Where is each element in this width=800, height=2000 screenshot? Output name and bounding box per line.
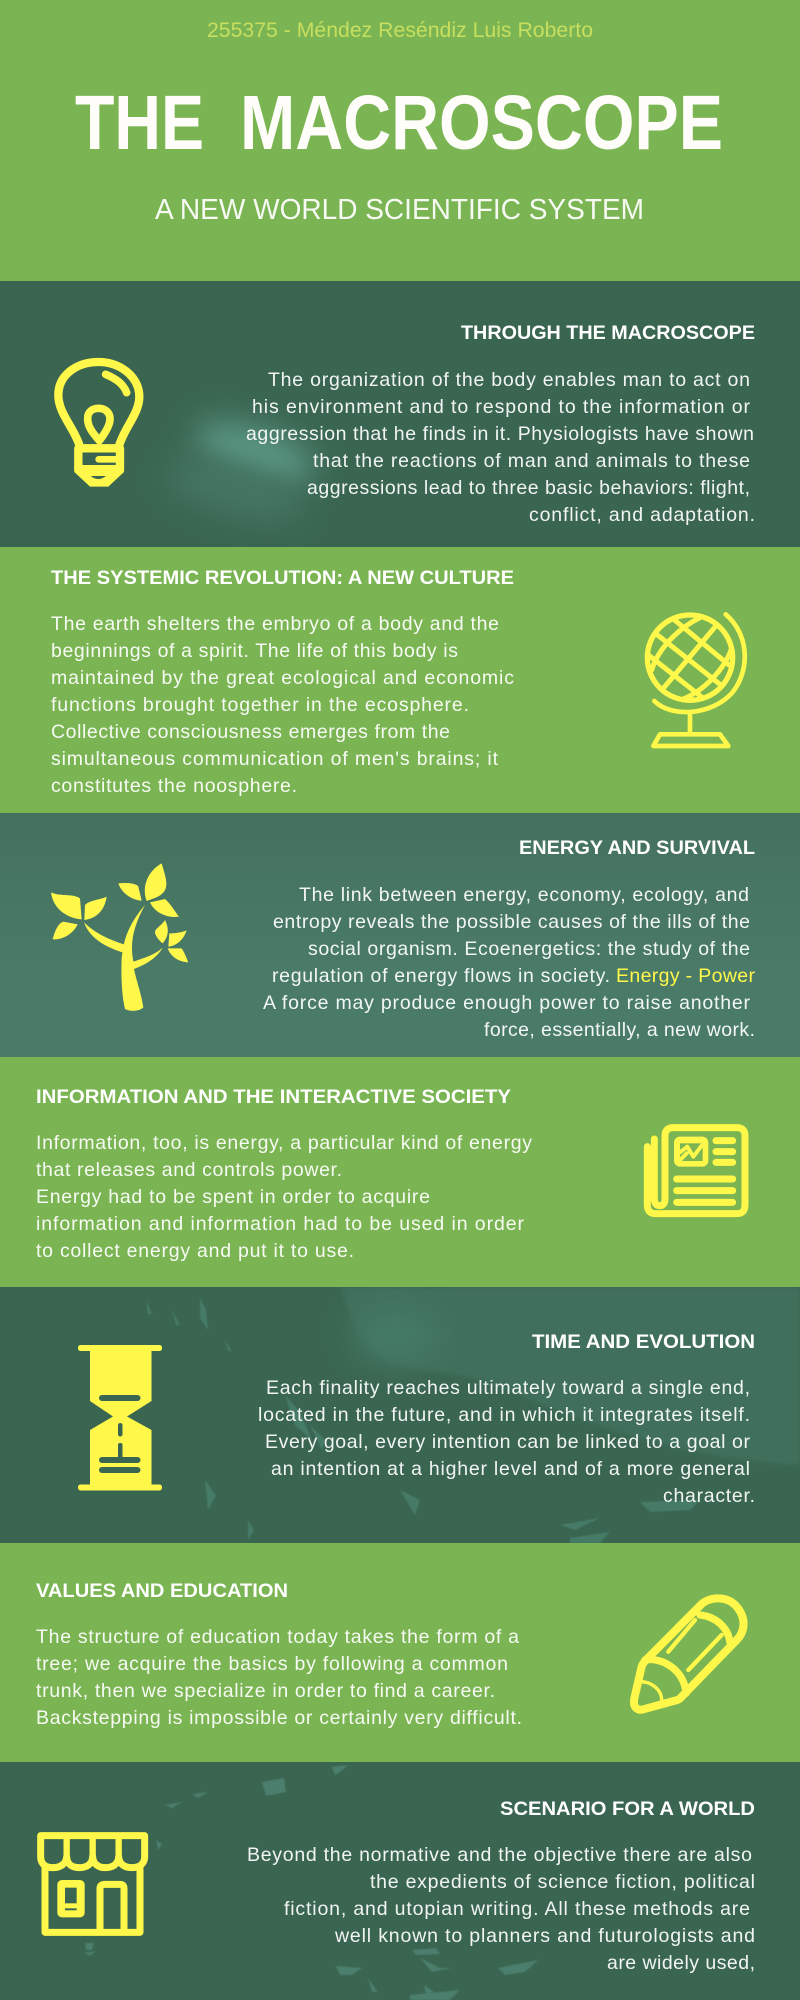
body text: trunk, then we specialize in order to find a career.	[36, 1680, 495, 1702]
body text: social organism. Ecoenergetics: the study of the	[308, 938, 750, 960]
body text: simultaneous communication of men's brains; it	[51, 748, 499, 770]
heading: ENERGY AND SURVIVAL	[519, 837, 755, 859]
body text	[51, 613, 514, 797]
body text: A force may produce enough power to raise another	[263, 992, 750, 1014]
body text: Each finality reaches ultimately toward a single end,	[266, 1377, 750, 1399]
panel: values and education	[0, 1543, 800, 1762]
body text: conflict, and adaptation.	[529, 504, 755, 526]
title	[75, 80, 723, 166]
panel: information and the interactive society	[0, 1057, 800, 1287]
body text: that releases and controls power.	[36, 1159, 342, 1181]
body text: Every goal, every intention can be linked to a goal or	[265, 1431, 750, 1453]
body text: information and information had to be used in order	[36, 1213, 524, 1235]
heading: SCENARIO FOR A WORLD	[500, 1798, 755, 1820]
body text: maintained by the great ecological and economic	[51, 667, 514, 689]
body text	[247, 1844, 755, 1974]
subtitle: A NEW WORLD SCIENTIFIC SYSTEM	[155, 194, 644, 226]
body text: The organization of the body enables man to act on	[268, 369, 750, 391]
body text: that the reactions of man and animals to these	[313, 450, 750, 472]
panel: header	[0, 0, 800, 281]
body text	[36, 1132, 532, 1262]
title: MACROSCOPE	[240, 80, 723, 166]
icon: globe	[647, 614, 745, 746]
heading: VALUES AND EDUCATION	[36, 1580, 288, 1602]
icon: storefront	[41, 1836, 145, 1932]
panel: energy and survival	[0, 813, 800, 1057]
heading: INFORMATION AND THE INTERACTIVE SOCIETY	[36, 1086, 511, 1108]
panel: the systemic revolution	[51, 570, 748, 796]
body text	[36, 1626, 522, 1729]
body text: the expedients of science fiction, political	[370, 1871, 755, 1893]
body text: regulation of energy flows in society.	[272, 965, 610, 987]
icon: light bulb	[58, 362, 139, 487]
panel: time and evolution	[0, 1287, 800, 1543]
body text: aggression that he finds in it. Physiologists have shown	[246, 423, 754, 445]
heading: THROUGH THE MACROSCOPE	[461, 322, 755, 344]
icon: newspaper	[647, 1128, 745, 1214]
body text: are widely used,	[607, 1952, 755, 1974]
body text: functions brought together in the ecosphere.	[51, 694, 469, 716]
body text: The earth shelters the embryo of a body and the	[51, 613, 499, 635]
body text: well known to planners and futurologists and	[334, 1925, 755, 1947]
author line: 255375 - Méndez Reséndiz Luis Roberto	[207, 19, 593, 42]
body text: constitutes the noosphere.	[51, 775, 297, 797]
body text: his environment and to respond to the information or	[252, 396, 750, 418]
title: THE	[75, 80, 204, 166]
body text: entropy reveals the possible causes of the ills of the	[273, 911, 750, 933]
body text	[263, 884, 756, 1041]
body text: Information, too, is energy, a particular kind of energy	[36, 1132, 532, 1154]
body text: Backstepping is impossible or certainly very difficult.	[36, 1707, 522, 1729]
body text: force, essentially, a new work.	[484, 1019, 755, 1041]
body text: Beyond the normative and the objective there are also	[247, 1844, 752, 1866]
body text: The structure of education today takes the form of a	[36, 1626, 519, 1648]
body text: tree; we acquire the basics by following a common	[36, 1653, 508, 1675]
body text: aggressions lead to three basic behaviors: flight,	[307, 477, 750, 499]
body text: fiction, and utopian writing. All these methods are	[284, 1898, 750, 1920]
icon: pencil	[634, 1598, 744, 1710]
body text: character.	[663, 1485, 755, 1507]
body text: Collective consciousness emerges from the	[51, 721, 450, 743]
body text	[258, 1377, 755, 1507]
icon: tree	[51, 863, 188, 1011]
body text: Energy - Power	[616, 965, 756, 987]
body text	[246, 369, 755, 526]
panel: scenario for a world	[0, 1762, 800, 2000]
body text: an intention at a higher level and of a more general	[271, 1458, 750, 1480]
panel: through the macroscope	[0, 281, 800, 547]
body text: located in the future, and in which it integrates itself.	[258, 1404, 750, 1426]
body text: Energy had to be spent in order to acquire	[36, 1186, 430, 1208]
body text: The link between energy, economy, ecology, and	[299, 884, 749, 906]
body text: beginnings of a spirit. The life of this body is	[51, 640, 458, 662]
icon: hourglass	[78, 1345, 162, 1490]
heading: TIME AND EVOLUTION	[532, 1331, 755, 1353]
body text: to collect energy and put it to use.	[36, 1240, 354, 1262]
heading: THE SYSTEMIC REVOLUTION: A NEW CULTURE	[51, 567, 514, 589]
